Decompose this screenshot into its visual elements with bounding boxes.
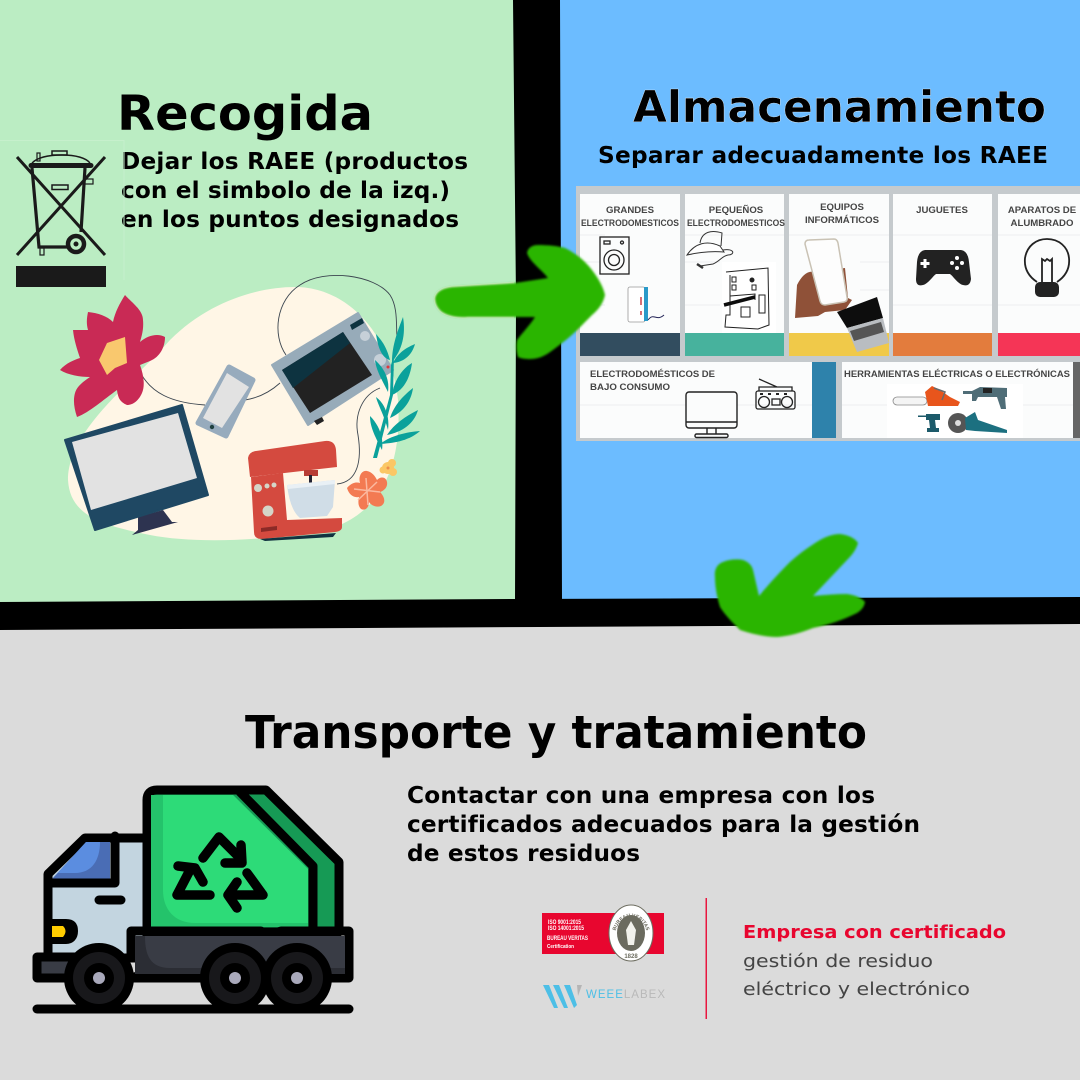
text block: certified company: gestión de residuo bbox=[743, 951, 933, 972]
text block: transporte instructions: Contactar con una empresa con los bbox=[407, 782, 875, 809]
panel: almacenamiento blue background bbox=[555, 0, 1080, 602]
heading: Almacenamiento: Almacenamiento bbox=[633, 82, 1046, 133]
text block: recogida instructions: con el simbolo de la izq.) bbox=[121, 177, 450, 204]
card: pequeños electrodomesticos: ELECTRODOMESTICOS bbox=[687, 218, 786, 229]
card: equipos informáticos: EQUIPOS bbox=[820, 202, 864, 213]
monitor bbox=[65, 405, 208, 535]
icon: chainsaw bbox=[893, 386, 960, 406]
card: grandes electrodomesticos bbox=[580, 194, 680, 356]
small yellow flower bbox=[380, 459, 397, 476]
icon: black bar under bin symbol bbox=[16, 266, 106, 287]
black horizontal divider bbox=[0, 597, 1080, 630]
icon: angle grinder bbox=[948, 412, 1007, 433]
panel: RAEE categories table bbox=[576, 186, 1080, 441]
card: electrodomésticos de bajo consumo: ELECTRODOMÉSTICOS DE bbox=[590, 368, 716, 380]
heading: Transporte y tratamiento: Transporte y tratamiento bbox=[245, 706, 867, 759]
icon: coffee machine bbox=[722, 262, 776, 333]
icon: light bulb bbox=[1025, 239, 1069, 297]
card: aparatos de alumbrado bbox=[998, 194, 1080, 356]
cream blob bbox=[68, 287, 399, 540]
card: juguetes bbox=[893, 194, 992, 356]
icon: cordless drill bbox=[918, 414, 940, 432]
icon: iron bbox=[687, 232, 733, 268]
text block: certified company: eléctrico y electrónico bbox=[743, 979, 970, 1000]
card: pequeños electrodomesticos bbox=[685, 194, 786, 356]
text block: transporte instructions: de estos residuos bbox=[407, 840, 640, 867]
card: equipos informáticos bbox=[789, 194, 889, 356]
card: herramientas eléctricas o electrónicas bbox=[842, 362, 1080, 438]
logo: WEEELABEX: WEEELABEX bbox=[586, 989, 665, 1001]
heading: Recogida: Recogida bbox=[117, 86, 373, 142]
text block: recogida instructions: Dejar los RAEE (productos bbox=[121, 148, 468, 175]
logo: Bureau Veritas certification bbox=[542, 904, 664, 962]
wires bbox=[137, 275, 397, 484]
orange flower bbox=[347, 471, 387, 510]
logo: Bureau Veritas certification: ISO 14001:2015 bbox=[548, 926, 585, 932]
teal leaf branch bbox=[370, 317, 420, 458]
text block: recogida instructions: en los puntos designados bbox=[121, 206, 459, 233]
text block: certified company bbox=[743, 923, 1006, 1000]
logo: Bureau Veritas certification: Certification bbox=[547, 944, 575, 950]
crimson flower bbox=[60, 295, 165, 417]
logo: Bureau Veritas certification: 1828 bbox=[624, 954, 638, 960]
icon: recycling truck bbox=[37, 790, 349, 1013]
text block: certified company: Empresa con certificado bbox=[743, 923, 1006, 943]
icon: radio bbox=[756, 379, 795, 409]
logo: Bureau Veritas certification: ISO 9001:2015 bbox=[548, 920, 582, 926]
icon: television bbox=[686, 392, 737, 438]
icon: hammer drill bbox=[963, 387, 1007, 409]
logo: Bureau Veritas certification: BUREAU VERITAS bbox=[612, 914, 650, 930]
vertical red divider bbox=[706, 898, 707, 1019]
card: herramientas eléctricas o electrónicas: HERRAMIENTAS ELÉCTRICAS O ELECTRÓNICAS bbox=[844, 368, 1071, 380]
recycling symbol bbox=[177, 837, 263, 908]
icon: crossed-out wheelie bin WEEE symbol bbox=[0, 140, 124, 280]
card: pequeños electrodomesticos: PEQUEÑOS bbox=[709, 205, 764, 216]
card: electrodomésticos de bajo consumo bbox=[580, 362, 836, 438]
card: electrodomésticos de bajo consumo: BAJO CONSUMO bbox=[590, 382, 671, 393]
microwave bbox=[272, 313, 393, 425]
smartphone bbox=[198, 367, 253, 436]
truck chassis bbox=[37, 931, 349, 978]
black vertical divider bbox=[513, 0, 562, 602]
ground line bbox=[37, 1004, 349, 1014]
text block: transporte instructions bbox=[407, 782, 920, 867]
panel: bottom grey background bbox=[0, 600, 1080, 1080]
arrow: green right arrow bbox=[435, 245, 605, 359]
text block: almacenamiento subtitle: Separar adecuadamente los RAEE bbox=[598, 142, 1048, 169]
logo: Bureau Veritas certification: BUREAU VERITAS bbox=[547, 936, 588, 942]
stand mixer bbox=[248, 441, 342, 541]
text block: recogida instructions bbox=[121, 148, 468, 233]
truck cab bbox=[48, 836, 147, 958]
truck container bbox=[147, 790, 339, 932]
text block: transporte instructions: certificados adecuados para la gestión bbox=[407, 811, 920, 838]
panel: recogida green background bbox=[0, 0, 520, 605]
logo: WEEELABEX bbox=[543, 985, 665, 1008]
card: aparatos de alumbrado: ALUMBRADO bbox=[1011, 218, 1074, 229]
icon: laptop bbox=[837, 297, 889, 352]
arrow: green down arrow bbox=[715, 534, 865, 637]
icon: washing machine bbox=[600, 237, 629, 274]
card: grandes electrodomesticos: ELECTRODOMESTICOS bbox=[581, 218, 680, 229]
illustration: electronic devices on cream blob bbox=[60, 275, 420, 541]
card: juguetes: JUGUETES bbox=[916, 205, 968, 216]
truck wheels bbox=[64, 943, 332, 1013]
card: grandes electrodomesticos: GRANDES bbox=[606, 205, 655, 216]
icon: fridge bbox=[628, 287, 664, 322]
card: aparatos de alumbrado: APARATOS DE bbox=[1008, 205, 1077, 216]
card: equipos informáticos: INFORMÁTICOS bbox=[805, 214, 880, 226]
icon: hand with phone bbox=[795, 239, 852, 318]
icon: gamepad bbox=[916, 250, 971, 285]
table background bbox=[576, 186, 1080, 441]
